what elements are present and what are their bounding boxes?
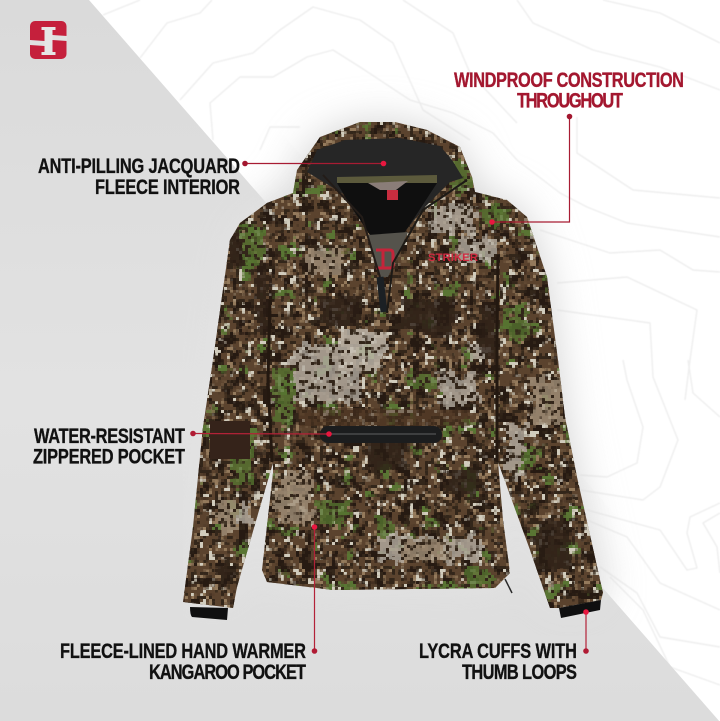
callout: water-resistant pocket: ZIPPERED POCKET xyxy=(33,445,185,468)
jacket glow on grey panel xyxy=(183,122,603,608)
logo: Striker S mark xyxy=(30,21,67,59)
hood fleece lining xyxy=(307,138,463,235)
kangaroo pocket flap xyxy=(297,407,470,426)
callout: water-resistant pocket xyxy=(33,424,332,468)
callout: anti-pilling fleece: ANTI-PILLING JACQUARD xyxy=(38,154,240,177)
callout: windproof construction: WINDPROOF CONSTRUCTION xyxy=(454,68,684,91)
jacket soft shadow on white xyxy=(183,122,603,608)
jacket xyxy=(183,122,603,620)
callout: anti-pilling fleece xyxy=(38,154,386,198)
jacket body camouflage xyxy=(183,122,603,608)
callout: lycra cuffs xyxy=(419,609,589,683)
callout: kangaroo pocket: FLEECE-LINED HAND WARMER xyxy=(60,639,306,662)
inner chest logo xyxy=(376,250,393,268)
collar brim stripe xyxy=(337,175,437,183)
callout: water-resistant pocket: WATER-RESISTANT xyxy=(34,424,185,447)
callout: kangaroo pocket: KANGAROO POCKET xyxy=(149,660,306,683)
callout: windproof construction xyxy=(454,68,684,225)
right cuff xyxy=(559,600,601,618)
callout: kangaroo pocket xyxy=(60,524,317,683)
sleeve pocket xyxy=(210,421,250,459)
inner placket xyxy=(368,232,408,277)
collar label xyxy=(368,181,408,200)
left cuff xyxy=(190,607,228,620)
brand text on chest: STRIKER xyxy=(428,252,478,264)
inner neck xyxy=(337,183,437,235)
zippered pocket xyxy=(320,426,442,443)
sleeve seams xyxy=(268,255,498,462)
callout: lycra cuffs: LYCRA CUFFS WITH xyxy=(419,639,577,662)
drawcord xyxy=(505,579,512,593)
callout: windproof construction: THROUGHOUT xyxy=(517,89,623,112)
callout: lycra cuffs: THUMB LOOPS xyxy=(462,660,577,683)
callout: anti-pilling fleece: FLEECE INTERIOR xyxy=(95,175,240,198)
zipper and collar seam xyxy=(323,175,467,313)
